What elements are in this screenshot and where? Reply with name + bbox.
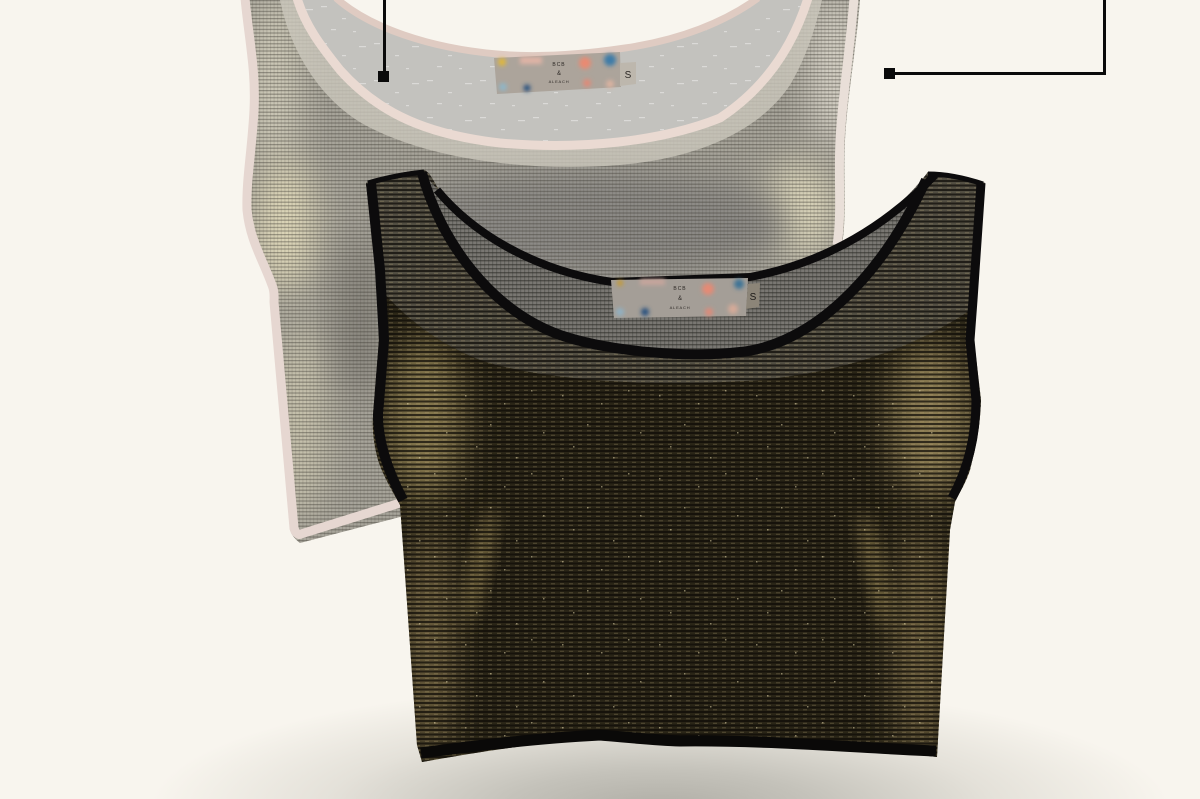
back top rear neck binding <box>336 0 758 56</box>
front top inner mesh between necklines <box>425 175 925 354</box>
front top: black metallic mesh <box>360 165 990 765</box>
back top neck label <box>494 52 636 94</box>
front top rear neck binding <box>437 175 935 282</box>
back top front neck binding <box>297 0 808 145</box>
front top right binding <box>952 183 981 498</box>
front top front neck binding <box>422 173 926 354</box>
back top lighter neck yoke <box>280 0 822 167</box>
front top size tag: S <box>750 292 757 303</box>
front top label sub-wordmark: ALEACH <box>670 305 690 310</box>
front top label wordmark: BCB <box>673 286 687 292</box>
back top body fabric <box>230 0 870 560</box>
ground shadow <box>150 680 1170 799</box>
back top label sub-wordmark: ALEACH <box>549 79 569 84</box>
front top body fabric <box>360 165 990 765</box>
front top left binding <box>371 183 403 500</box>
front top hem <box>421 735 936 753</box>
back top side bindings and hem <box>245 0 400 535</box>
back top label wordmark: BCB <box>552 62 566 68</box>
product illustration <box>221 0 1106 799</box>
front top shoulder edge <box>368 172 983 184</box>
callout line: right <box>884 0 1106 79</box>
back top size tag: S <box>625 70 632 81</box>
front top sheer yoke <box>360 165 990 383</box>
back top label ampersand: & <box>557 71 561 77</box>
front top neck label <box>611 278 760 318</box>
back top right binding <box>837 0 854 245</box>
front top label ampersand: & <box>678 296 682 302</box>
back top neck inner panel <box>297 0 808 145</box>
callout line: left <box>378 0 389 82</box>
back top: white metallic mesh <box>230 0 870 560</box>
